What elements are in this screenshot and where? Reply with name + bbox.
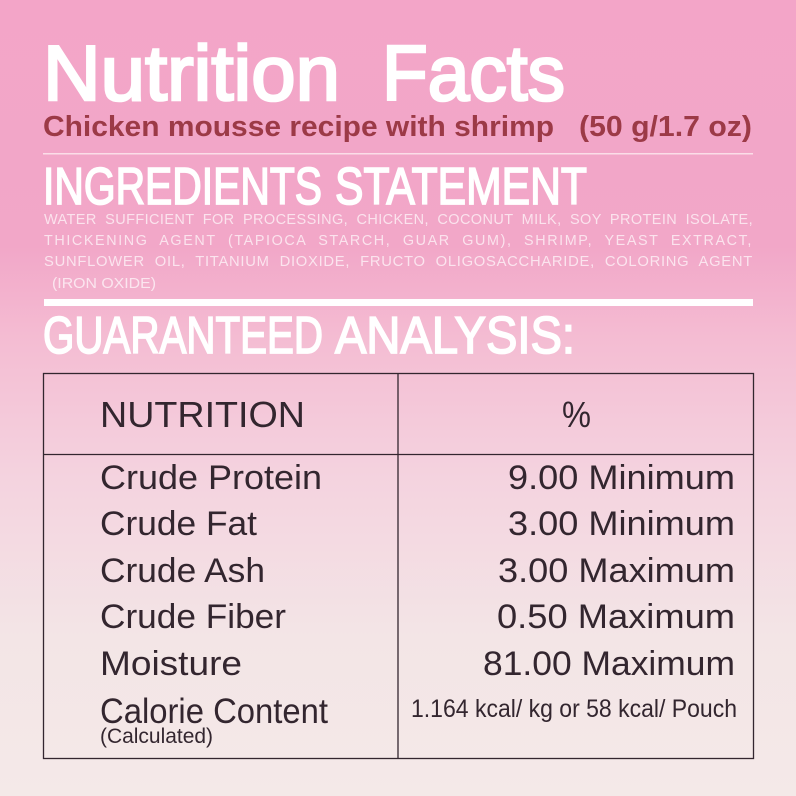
heading: guaranteed analysis: GUARANTEED <box>43 307 323 365</box>
row: calorie content: Calorie Content <box>100 692 328 731</box>
row: crude fiber <box>100 598 735 636</box>
row: moisture: Moisture <box>100 645 242 683</box>
row: calorie content: (Calculated) <box>100 725 213 748</box>
subtitle: Chicken mousse recipe with shrimp <box>43 111 554 143</box>
row: crude ash: Crude Ash <box>100 552 265 590</box>
row: crude fat: 3.00 Minimum <box>508 505 735 543</box>
row: crude protein <box>100 459 735 497</box>
heading: ingredients statement: STATEMENT <box>335 158 587 216</box>
title: Nutrition <box>43 29 340 117</box>
subtitle <box>43 111 752 143</box>
heading: ingredients statement <box>43 158 587 216</box>
row: crude fiber: Crude Fiber <box>100 598 286 636</box>
ingredients text: SUNFLOWER OIL, TITANIUM DIOXIDE, FRUCTO OLIGOSACCHARIDE, COLORING AGENT <box>44 254 753 270</box>
row: crude fat: Crude Fat <box>100 505 258 543</box>
title <box>43 29 565 117</box>
ingredients text: THICKENING AGENT (TAPIOCA STARCH, GUAR GUM), SHRIMP, YEAST EXTRACT, <box>44 233 753 249</box>
heading: guaranteed analysis <box>43 307 575 365</box>
row: crude protein: Crude Protein <box>100 459 322 497</box>
row: calorie content: 1.164 kcal/ kg or 58 kcal/ Pouch <box>411 695 737 723</box>
ingredients text: WATER SUFFICIENT FOR PROCESSING, CHICKEN, COCONUT MILK, SOY PROTEIN ISOLATE, <box>44 212 753 228</box>
nutrition table <box>43 373 754 758</box>
row: crude ash <box>100 552 735 590</box>
subtitle: (50 g/1.7 oz) <box>579 111 752 143</box>
row: crude protein: 9.00 Minimum <box>508 459 735 497</box>
title: Facts <box>382 29 565 117</box>
row: calorie content <box>100 692 737 748</box>
table header: % <box>562 394 591 435</box>
heading: guaranteed analysis: ANALYSIS: <box>335 307 575 365</box>
heading: ingredients statement: INGREDIENTS <box>43 158 322 216</box>
table header: NUTRITION <box>100 394 305 435</box>
row: moisture <box>100 645 735 683</box>
row: crude fiber: 0.50 Maximum <box>497 598 735 636</box>
table header <box>100 394 591 435</box>
ingredients text: (IRON OXIDE) <box>52 276 156 292</box>
row: crude fat <box>100 505 735 543</box>
row: moisture: 81.00 Maximum <box>483 645 735 683</box>
ingredients text <box>44 212 753 292</box>
row: crude ash: 3.00 Maximum <box>498 552 735 590</box>
